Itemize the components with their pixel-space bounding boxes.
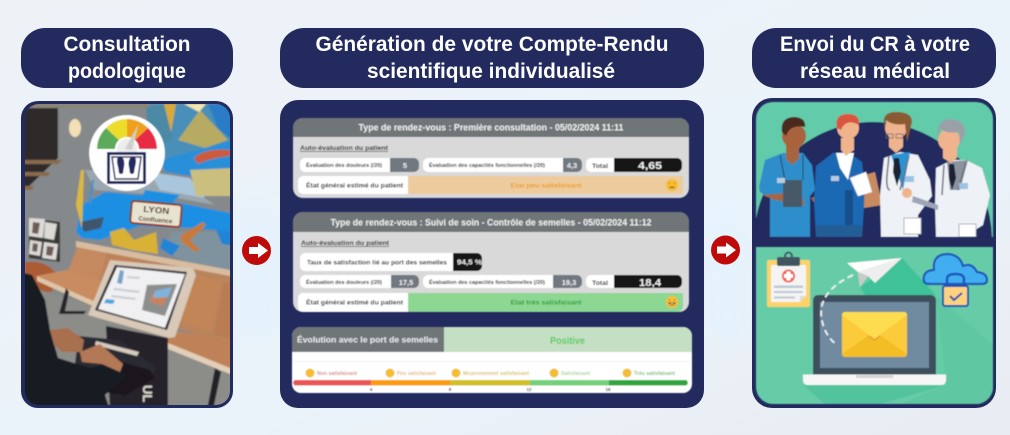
card: suivi de soin: 19,3 [562, 278, 576, 287]
arrow: step 2 to 3 [711, 236, 740, 264]
heading: Consultation podologique: Consultation [64, 33, 190, 56]
heading: Envoi du CR: Envoi du CR à votre [780, 33, 970, 56]
card: première consultation: Évaluation des douleurs (/20) [306, 161, 382, 169]
card: première consultation: Total [592, 163, 608, 170]
stairs [25, 107, 59, 190]
lower right mural [169, 232, 230, 270]
heading: Consultation podologique [21, 28, 233, 88]
card: suivi de soin: Évaluation des capacités fonctionnelles (/20) [429, 278, 545, 286]
panel: compte-rendu [280, 100, 704, 408]
mural upper colours [146, 104, 230, 159]
heading: Génération du compte-rendu: scientifique individualisé [367, 60, 615, 83]
scale ticks: 16 [605, 387, 611, 392]
card: première consultation [293, 118, 689, 198]
heading: Envoi du CR [752, 28, 996, 88]
bench seat left [38, 269, 102, 302]
doctor 1 [759, 153, 815, 237]
stand [106, 326, 168, 410]
card: suivi de soin: 18,4 [639, 277, 661, 289]
grey upper mural lines [85, 170, 215, 205]
yellow drips [76, 170, 84, 228]
icon: gauge and foot scale badge [89, 115, 165, 191]
scale legend: Très satisfaisant [634, 371, 675, 377]
card: suivi de soin: Total [592, 280, 608, 287]
card: suivi de soin: 17,5 [399, 278, 413, 287]
scale ticks: 12 [526, 387, 532, 392]
card: suivi de soin: État général estimé du patient [306, 298, 404, 306]
card: première consultation: 4,65 [638, 160, 662, 172]
heading: Génération du compte-rendu: Génération de votre Compte-Rendu [316, 33, 668, 56]
illustration: secure email [756, 247, 993, 404]
card: première consultation: Auto-évaluation du patient [300, 145, 389, 152]
card: suivi de soin [293, 212, 689, 312]
scale ticks [370, 387, 611, 392]
card: première consultation: Évaluation des capacités fonctionnelles (/20) [429, 161, 545, 169]
brochure rack [29, 218, 60, 262]
scale legend: Non satisfaisant [317, 371, 357, 377]
scale legend: Moyennement satisfaisant [463, 371, 529, 377]
sign: Lyon Confluence [130, 201, 182, 227]
tablet [88, 260, 196, 338]
stool [25, 262, 55, 292]
sign: Lyon Confluence: Confluence [138, 216, 173, 225]
scale legend: Satisfaisant [561, 371, 590, 377]
icon: paper plane [847, 258, 902, 287]
doctor 3 [880, 152, 932, 237]
card: première consultation: Etat peu satisfaisant [510, 182, 582, 190]
dashed flight path [821, 275, 853, 345]
blue band and red script [160, 140, 235, 176]
floor [39, 289, 46, 293]
card: suivi de soin: Évaluation des douleurs (/20) [306, 278, 382, 286]
arrow: step 1 to 2 [242, 236, 271, 265]
heading: Génération du compte-rendu [280, 28, 704, 88]
card: évolution [292, 327, 692, 393]
panel: consultation photo: UL [140, 385, 155, 402]
keyboard [75, 336, 156, 397]
scale bar [293, 380, 688, 386]
card: première consultation: Type de rendez-vous : Première consultation - 05/02/2024 11:11 [358, 122, 624, 132]
heading: Envoi du CR: réseau médical [800, 60, 950, 83]
doctor 4 [935, 160, 990, 237]
person [25, 272, 117, 405]
icon: clipboard [767, 252, 810, 307]
card: première consultation: État général estimé du patient [306, 180, 404, 190]
illustration: medical team [755, 101, 994, 238]
card: première consultation: 5 [403, 161, 407, 170]
heading: Consultation podologique: podologique [68, 60, 186, 83]
scale ticks: 8 [449, 387, 452, 392]
card: première consultation: 4,3 [567, 161, 577, 170]
card: évolution: Positive [550, 336, 585, 347]
bench seat right [166, 330, 230, 368]
icon: cloud and lock [924, 254, 987, 306]
card: suivi de soin: Taux de satisfaction lié au port des semelles [307, 260, 447, 266]
panel: consultation photo [20, 100, 235, 410]
bench back [100, 252, 230, 340]
scale legend: Peu satisfaisant [397, 371, 436, 377]
river [76, 192, 235, 240]
cream city [190, 168, 235, 196]
card: suivi de soin: Type de rendez-vous : Suivi de soin - Contrôle de semelles - 05/02/2024 11:12 [330, 218, 652, 228]
card: suivi de soin: 94,5 % [457, 260, 483, 266]
card: suivi de soin: Etat très satisfaisant [510, 300, 582, 306]
panel: réseau médical [752, 98, 996, 408]
scale ticks: 4 [370, 387, 373, 392]
sign: Lyon Confluence: LYON [143, 204, 170, 216]
card: évolution: Évolution avec le port de semelles [297, 334, 438, 344]
scale legend [306, 368, 675, 378]
doctor 2 [814, 152, 865, 237]
card: suivi de soin: Auto-évaluation du patient [301, 240, 390, 247]
icon: laptop with envelope [803, 295, 946, 385]
